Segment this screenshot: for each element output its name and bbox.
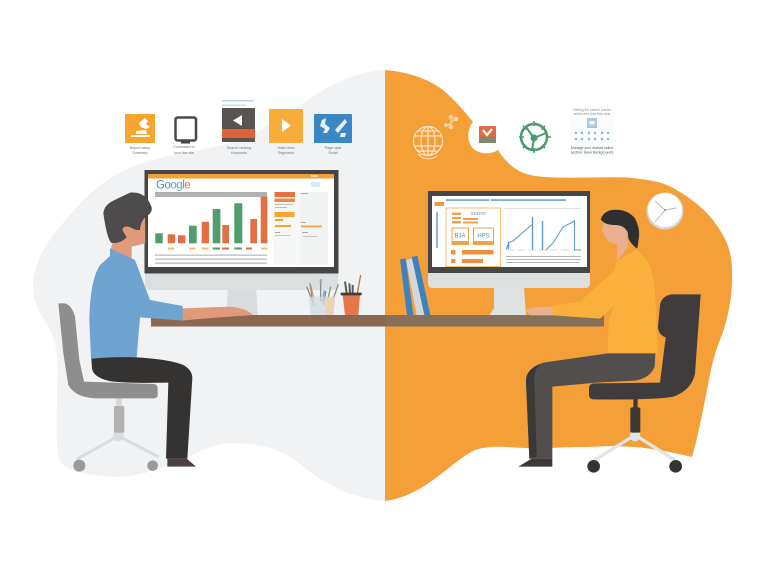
label: icon captions: Report setup	[130, 146, 150, 150]
books	[400, 256, 430, 315]
trouser shadow	[526, 364, 540, 459]
icon: dark video tile	[222, 100, 255, 142]
label: icon captions: Page style	[325, 146, 341, 150]
shoe	[518, 459, 552, 467]
icon: wall clock	[646, 192, 684, 230]
person: right analyst with chair	[518, 210, 701, 473]
label: icon captions: Keywords	[231, 151, 247, 155]
label: icon captions: Segments	[278, 151, 294, 155]
label: icon captions: Connected to	[173, 145, 195, 149]
orange summary panel: 318370	[470, 211, 486, 216]
icon: badge with check	[479, 126, 496, 143]
black office chair	[587, 294, 701, 473]
line charts	[504, 208, 581, 250]
icon: green gear wheel	[519, 121, 551, 153]
hair, face and ear	[103, 193, 152, 260]
desk	[151, 315, 604, 326]
right screen	[432, 196, 587, 267]
icon: molecule nodes	[445, 115, 458, 129]
panel: small legend card	[570, 107, 614, 157]
monitor: left	[144, 170, 338, 316]
label: icon captions	[130, 145, 341, 155]
label: icon captions: your live site	[174, 151, 194, 155]
panel: right orange background blob	[385, 70, 732, 501]
icon: monitor outline	[176, 118, 196, 144]
grey trousers	[526, 353, 655, 459]
orange summary panel	[446, 208, 500, 266]
orange summary panel: HPS	[477, 234, 490, 240]
panel: small legend card: Setting the search results	[573, 108, 611, 112]
icon: wireframe globe	[414, 126, 442, 159]
label: icon captions: Summary	[132, 151, 148, 155]
glass pen cup	[307, 279, 338, 315]
panel: small legend card: online and how they rank	[574, 112, 611, 116]
bar chart	[155, 197, 268, 250]
pen holders	[307, 275, 362, 315]
monitor: right	[428, 191, 590, 316]
panel: small legend card: section: Save Backgrounds	[571, 150, 613, 154]
logo text: Google	[156, 180, 190, 192]
shoe	[167, 459, 196, 467]
black trousers	[91, 357, 192, 459]
icon row: right	[414, 107, 614, 159]
text lines	[155, 254, 267, 264]
blue shirt	[89, 248, 183, 359]
icon row: left	[125, 100, 352, 155]
icon: blue tool tile	[314, 114, 352, 143]
monitor chin and stand	[226, 288, 258, 316]
orange sweater	[552, 249, 658, 353]
monitor chin and stand	[489, 286, 526, 316]
label: icon captions: Video links	[277, 146, 295, 150]
orange summary panel: BJA	[454, 234, 466, 240]
neck, face and hair	[601, 210, 639, 262]
sidebar widgets	[274, 192, 328, 265]
icon: orange tool tile	[125, 114, 155, 143]
panel: left grey background blob	[33, 70, 385, 501]
forearm	[182, 307, 253, 321]
caption lines	[506, 256, 581, 263]
panel: small legend card: Manage your market online	[571, 146, 613, 150]
left screen	[148, 174, 334, 267]
hand	[525, 307, 553, 315]
orange pen cup	[341, 275, 362, 315]
label: icon captions: Script	[328, 151, 338, 155]
person: left analyst with chair	[58, 193, 253, 472]
grey office chair	[58, 303, 158, 472]
icon: orange play tile	[269, 109, 303, 143]
label: icon captions: Search ranking	[227, 146, 251, 150]
